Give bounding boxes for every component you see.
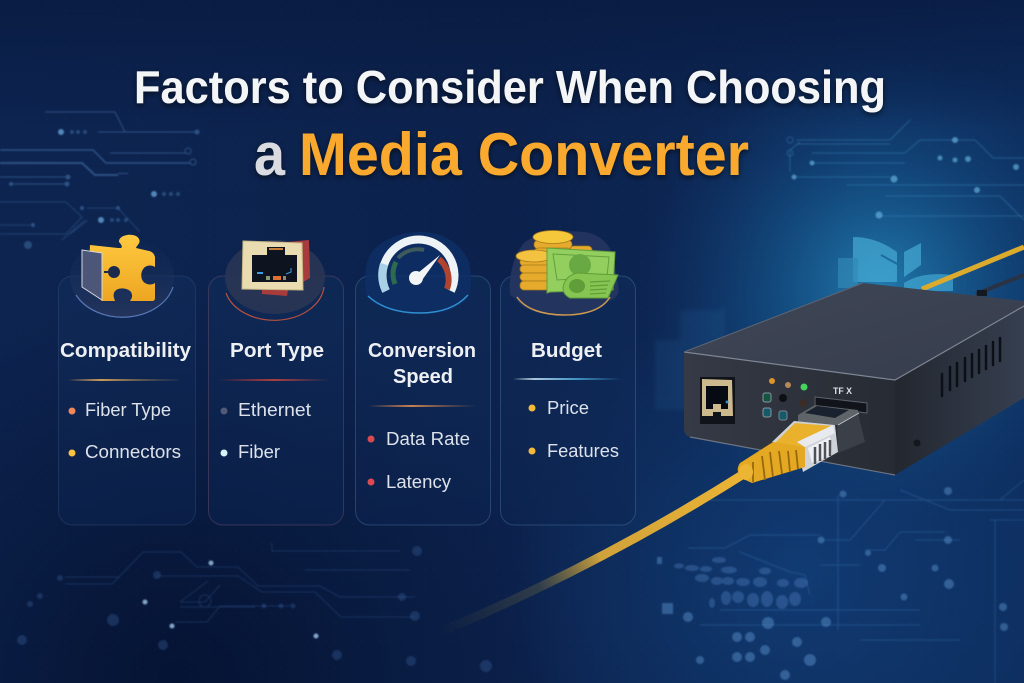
list: fiber type, connectors bbox=[68, 400, 181, 462]
panel: budget bbox=[500, 230, 636, 525]
title bbox=[134, 61, 886, 188]
heading: port type: Port Type bbox=[230, 340, 324, 362]
list: data rate, latency: Data Rate bbox=[386, 429, 470, 449]
icon: puzzle and folder bbox=[70, 235, 174, 317]
divider bbox=[513, 378, 621, 380]
side face bbox=[895, 306, 1024, 475]
heading: conversion speed: Speed bbox=[393, 366, 453, 388]
vents bbox=[942, 338, 1000, 396]
divider bbox=[68, 379, 179, 381]
RJ45 plug bbox=[738, 421, 838, 483]
icon: speedometer gauge bbox=[365, 232, 471, 314]
glow nodes top-left bbox=[24, 129, 180, 249]
heading: compatibility: Compatibility bbox=[60, 340, 192, 362]
list: price, features bbox=[528, 398, 619, 461]
faint building silhouette bbox=[655, 305, 725, 410]
icon: glowing book bbox=[838, 237, 953, 295]
panel: port type bbox=[208, 240, 344, 525]
divider bbox=[368, 405, 477, 407]
top face bbox=[684, 283, 1024, 380]
list: ethernet, fiber: Ethernet bbox=[238, 400, 311, 420]
title: Factors to Consider When Choosing bbox=[134, 61, 886, 113]
heading: budget: Budget bbox=[531, 340, 602, 362]
ethernet port bbox=[700, 377, 735, 424]
status LEDs bbox=[763, 378, 808, 420]
top-left circuit traces bbox=[0, 112, 200, 240]
list: data rate, latency: Latency bbox=[386, 472, 451, 492]
cable bbox=[445, 470, 750, 630]
bottom-left circuit traces bbox=[65, 544, 415, 622]
icon: ethernet port bbox=[225, 240, 325, 320]
list: ethernet, fiber bbox=[220, 400, 311, 462]
heading: conversion speed: Conversion bbox=[368, 340, 476, 362]
right circuit traces bbox=[787, 120, 1024, 220]
divider bbox=[219, 379, 330, 381]
heading: conversion speed bbox=[368, 340, 476, 388]
list: fiber type, connectors: Fiber Type bbox=[85, 400, 171, 420]
list: price, features: Price bbox=[547, 398, 589, 418]
icon: coins and cash bbox=[510, 230, 618, 315]
panel: conversion speed bbox=[356, 232, 490, 525]
port label: TF X bbox=[833, 386, 852, 396]
fiber port with connector bbox=[798, 397, 867, 453]
cable behind the device bbox=[922, 247, 1024, 294]
panel: compatibility bbox=[58, 235, 196, 525]
list: data rate, latency bbox=[368, 429, 470, 492]
media converter device bbox=[445, 283, 1024, 630]
title: Media Converter bbox=[299, 121, 749, 188]
front face bbox=[684, 352, 895, 475]
list: price, features: Features bbox=[547, 441, 619, 461]
list: ethernet, fiber: Fiber bbox=[238, 442, 280, 462]
bottom-right circuit traces bbox=[688, 480, 1024, 683]
list: fiber type, connectors: Connectors bbox=[85, 442, 181, 462]
title: a bbox=[254, 121, 286, 188]
